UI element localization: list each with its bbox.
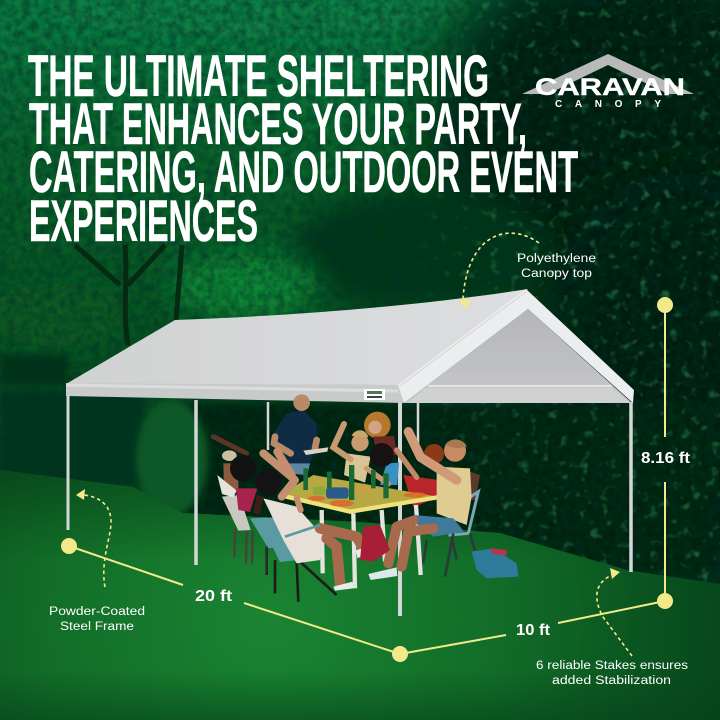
table food and bottles xyxy=(287,465,426,507)
dining party scene xyxy=(213,394,518,602)
title: EXPERIENCES xyxy=(29,189,258,254)
woman in blue xyxy=(367,443,399,485)
tent legs xyxy=(68,396,631,616)
logo: Caravan Canopy: CARAVAN xyxy=(535,74,685,101)
callout: steel frame: Powder-Coated xyxy=(49,606,145,618)
callout: polyethylene canopy top: Canopy top xyxy=(521,268,592,280)
dimension: 10 ft xyxy=(392,593,673,662)
gable interior xyxy=(404,309,632,403)
left guests xyxy=(213,437,280,575)
logo: Caravan Canopy xyxy=(522,54,694,110)
logo: Caravan Canopy: CANOPY xyxy=(555,99,661,110)
title xyxy=(28,44,578,254)
callout: steel frame: Steel Frame xyxy=(60,621,134,633)
front valance xyxy=(66,383,404,403)
woman in white and teal chair xyxy=(253,452,372,602)
guest in red xyxy=(397,444,444,507)
gable edge xyxy=(398,289,634,403)
callout: stakes: added Stabilization xyxy=(552,675,671,687)
red backpack xyxy=(360,525,390,562)
callout: stakes: 6 reliable Stakes ensures xyxy=(536,660,688,672)
waving man xyxy=(333,424,371,483)
dimension: 20 ft: 20 ft xyxy=(195,588,233,605)
table xyxy=(279,475,437,588)
tent label xyxy=(364,389,385,400)
dimension: 10 ft: 10 ft xyxy=(516,622,551,639)
callout: polyethylene canopy top xyxy=(459,233,596,310)
right man and chair xyxy=(368,432,480,580)
callout: steel frame xyxy=(49,489,145,633)
dimension: 8.16 ft xyxy=(641,297,691,600)
lawn xyxy=(0,470,720,720)
standing man xyxy=(273,394,328,475)
blue bag on lawn xyxy=(472,548,518,578)
canopy tent xyxy=(66,289,634,616)
dimension: 8.16 ft: 8.16 ft xyxy=(641,450,691,467)
callout: stakes xyxy=(536,568,688,687)
curly-haired woman xyxy=(364,412,397,455)
roof panel xyxy=(66,289,528,385)
callout: polyethylene canopy top: Polyethylene xyxy=(517,253,596,265)
dimension: 20 ft xyxy=(61,538,400,654)
